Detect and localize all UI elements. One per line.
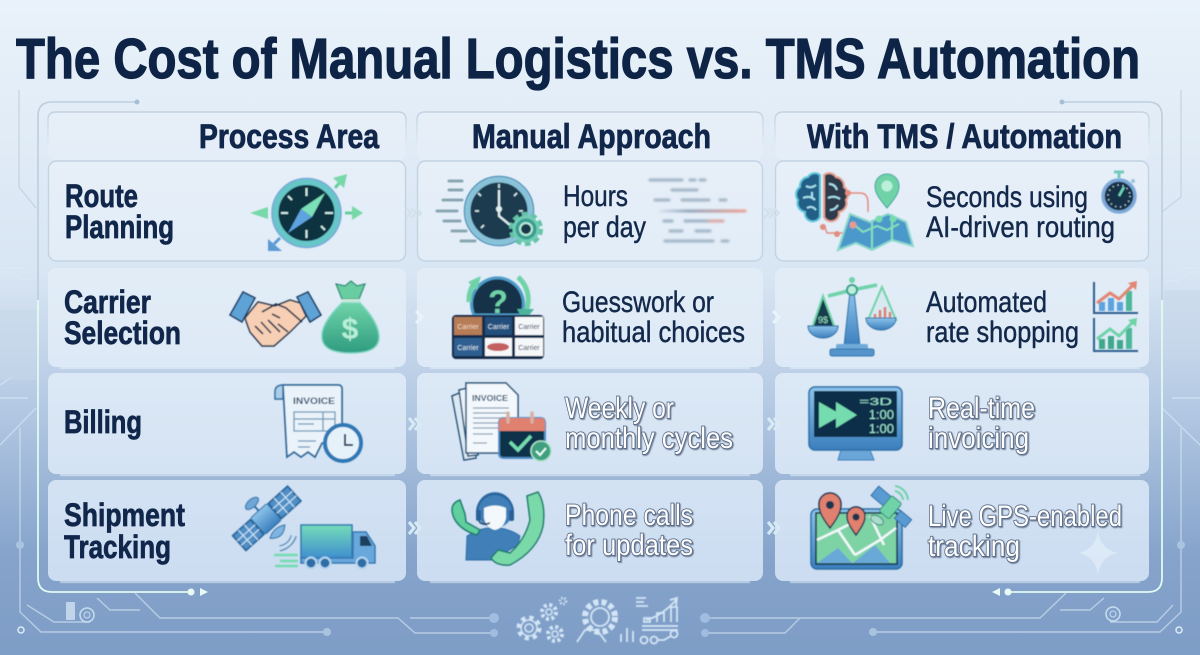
chevrons: row 3	[409, 418, 779, 430]
row panel: route planning TMS	[776, 161, 1148, 261]
row panel: billing TMS	[775, 373, 1149, 474]
icon: invoice with clock: INVOICE	[293, 396, 335, 407]
label: route planning	[65, 178, 174, 245]
text: real-time invoicing: Real-time	[928, 392, 1035, 425]
icon: delivery truck	[274, 525, 375, 568]
row panel: shipment tracking manual	[417, 480, 763, 581]
text: guesswork or habitual choices: Guesswork or	[562, 286, 714, 319]
text: weekly or monthly cycles	[565, 392, 733, 455]
icon: money bag: $	[342, 313, 359, 346]
label: route planning: Route	[65, 178, 138, 214]
text: automated rate shopping: Automated	[926, 286, 1047, 319]
text: seconds using AI-driven routing	[926, 181, 1115, 244]
icon: question mark and carrier cards: Carrier	[488, 324, 510, 331]
text: guesswork or habitual choices	[562, 286, 745, 349]
icon: call agent with phones	[452, 492, 544, 565]
column header: Manual Approach	[417, 112, 763, 160]
text: live GPS-enabled tracking: tracking	[928, 530, 1020, 563]
text: automated rate shopping	[926, 286, 1079, 349]
icon: question mark and carrier cards: Carrier	[457, 324, 479, 331]
row panel: route planning manual	[418, 161, 762, 261]
icon: monitor with fast-forward	[809, 387, 902, 460]
icon: monitor with fast-forward: =3D	[859, 397, 892, 408]
icon: rising rate charts	[1094, 281, 1138, 351]
icon: GPS map with satellite	[811, 486, 912, 569]
label: carrier selection: Selection	[64, 315, 181, 351]
icon: invoice with clock	[275, 385, 361, 461]
icon: satellite	[223, 475, 318, 570]
column header: Process Area: Process Area	[199, 118, 380, 156]
icon: question mark and carrier cards: ?	[488, 284, 508, 320]
row panel: carrier selection manual	[417, 268, 763, 367]
footer icon: growth chart	[636, 598, 678, 644]
icon: monitor with fast-forward: 1:00	[869, 421, 894, 436]
icon: compass	[250, 174, 363, 251]
icon: stopwatch	[1103, 172, 1135, 212]
footer icon: gears	[519, 598, 566, 641]
label: route planning: Planning	[65, 209, 174, 245]
text: hours per day: Hours	[563, 180, 628, 213]
icon: clock with gear	[437, 176, 539, 246]
icon: question mark and carrier cards: Carrier	[518, 345, 540, 352]
label: shipment tracking	[64, 497, 185, 565]
outer frame	[38, 100, 1162, 596]
chevrons: row 1	[406, 208, 779, 218]
row panel: route planning process	[48, 161, 406, 261]
chevrons: row 2	[416, 311, 779, 323]
text: automated rate shopping: rate shopping	[926, 316, 1079, 349]
icon: balance scale	[808, 277, 896, 356]
icon: question mark and carrier cards	[452, 276, 544, 359]
text: real-time invoicing: invoicing	[928, 422, 1029, 455]
text: seconds using AI-driven routing: AI-driven routing	[926, 211, 1115, 244]
icon: AI brain and map	[796, 173, 913, 250]
text: hours per day	[563, 180, 646, 244]
row panel: shipment tracking process	[48, 475, 406, 581]
text: weekly or monthly cycles: monthly cycles	[565, 422, 733, 455]
column header: With TMS / Automation: With TMS / Automation	[807, 118, 1122, 156]
column header: Process Area	[48, 112, 406, 160]
footer icon: gear with chart	[577, 602, 633, 642]
icon: money bag	[322, 281, 379, 353]
icon: handshake	[230, 292, 321, 346]
panel edge glow	[60, 368, 1140, 582]
icon: invoice stack with calendar: INVOICE	[472, 393, 508, 403]
text: live GPS-enabled tracking	[928, 500, 1122, 563]
text: guesswork or habitual choices: habitual choices	[562, 316, 745, 349]
row panel: billing process	[48, 373, 406, 474]
row panel: carrier selection process	[48, 268, 406, 367]
text: seconds using AI-driven routing: Seconds using	[926, 181, 1088, 214]
chevrons: row 4	[409, 522, 779, 534]
text: phone calls for updates	[565, 499, 693, 562]
text: real-time invoicing	[928, 392, 1035, 455]
icon: monitor with fast-forward: 1:00	[869, 407, 894, 422]
text: weekly or monthly cycles: Weekly or	[565, 392, 674, 425]
label: billing: Billing	[64, 404, 142, 440]
text: phone calls for updates: for updates	[565, 529, 693, 562]
row panel: carrier selection TMS	[775, 268, 1149, 367]
row panel: shipment tracking TMS	[775, 480, 1149, 581]
text: live GPS-enabled tracking: Live GPS-enabled	[928, 500, 1122, 533]
row panel: billing manual	[417, 373, 763, 474]
decorative motion dashes	[650, 180, 745, 241]
text: phone calls for updates: Phone calls	[565, 499, 693, 532]
icon: question mark and carrier cards: Carrier	[457, 345, 479, 352]
label: shipment tracking: Shipment	[64, 497, 185, 533]
column header: Manual Approach: Manual Approach	[472, 118, 711, 156]
column header: With TMS / Automation	[775, 112, 1149, 160]
label: shipment tracking: Tracking	[64, 529, 171, 565]
icon: balance scale: 9$	[818, 315, 828, 325]
icon: invoice stack with calendar	[452, 383, 551, 461]
decorative sparkle	[1078, 531, 1118, 574]
label: carrier selection: Carrier	[64, 284, 151, 320]
text: hours per day: per day	[563, 211, 646, 244]
icon: question mark and carrier cards: Carrier	[518, 324, 540, 331]
label: carrier selection	[64, 284, 181, 351]
